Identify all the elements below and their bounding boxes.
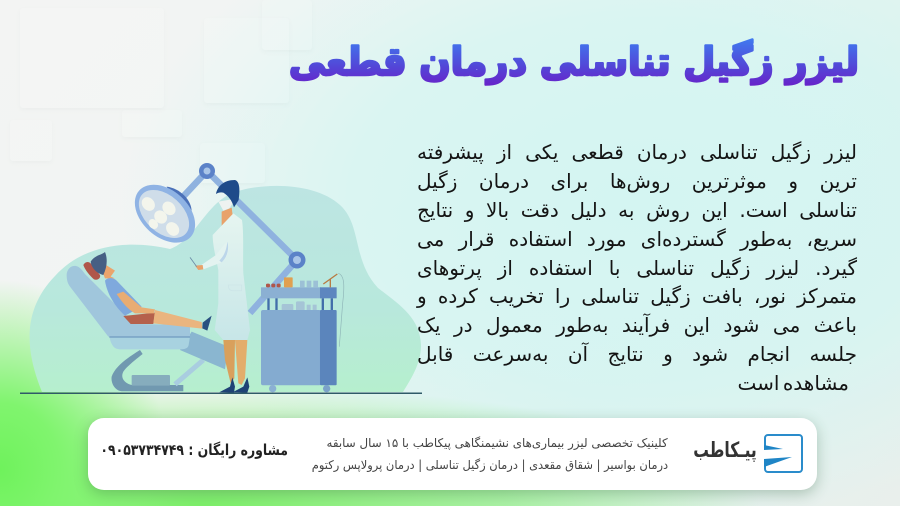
clinic description: کلینیک تخصصی لیزر بیماری‌های نشیمنگاهی پیکاطب با ۱۵ سال سابقه <box>327 436 668 450</box>
footer card <box>88 418 817 490</box>
illustration: dentist treating patient <box>20 163 422 394</box>
body paragraph: مشاهده است <box>738 371 849 395</box>
body paragraph: سریع، به‌طور گسترده‌ای مورد استفاده قرار می <box>417 227 857 251</box>
operating lamp <box>124 173 206 254</box>
body paragraph: لیزر زگیل تناسلی درمان قطعی یکی از پیشرفته <box>417 140 857 164</box>
body paragraph: باعث می شود این فرآیند به‌طور معمول در یک <box>417 313 857 337</box>
body paragraph: تناسلی است. این روش به دلیل دقت بالا و نتایج <box>417 198 857 222</box>
body paragraph <box>416 140 858 395</box>
dentist <box>190 180 250 393</box>
logo icon <box>764 434 803 473</box>
body paragraph: جلسه انجام شود و نتایج آن به‌سرعت قابل <box>417 342 857 366</box>
lamp arm <box>180 163 306 313</box>
floor line <box>20 392 422 394</box>
body paragraph: ترین و موثرترین روش‌ها برای درمان زگیل <box>417 169 857 193</box>
body paragraph: متمرکز نور، بافت زگیل تناسلی را تخریب کرده و <box>417 284 857 308</box>
logo wordmark: پیـکاطب <box>694 438 757 462</box>
dental chair <box>67 262 228 391</box>
free consultation phone: مشاوره رایگان : ۰۹۰۵۳۷۳۴۷۴۹ <box>100 441 288 459</box>
footer card: درمان بواسیر | شقاق مقعدی | درمان زگیل تناسلی | درمان پرولاپس رکتوم <box>312 458 668 472</box>
body paragraph: گیرد. لیزر زگیل تناسلی با استفاده از پرتوهای <box>417 256 857 280</box>
instrument cart <box>261 273 344 392</box>
patient <box>91 252 212 331</box>
background blob <box>30 186 421 392</box>
